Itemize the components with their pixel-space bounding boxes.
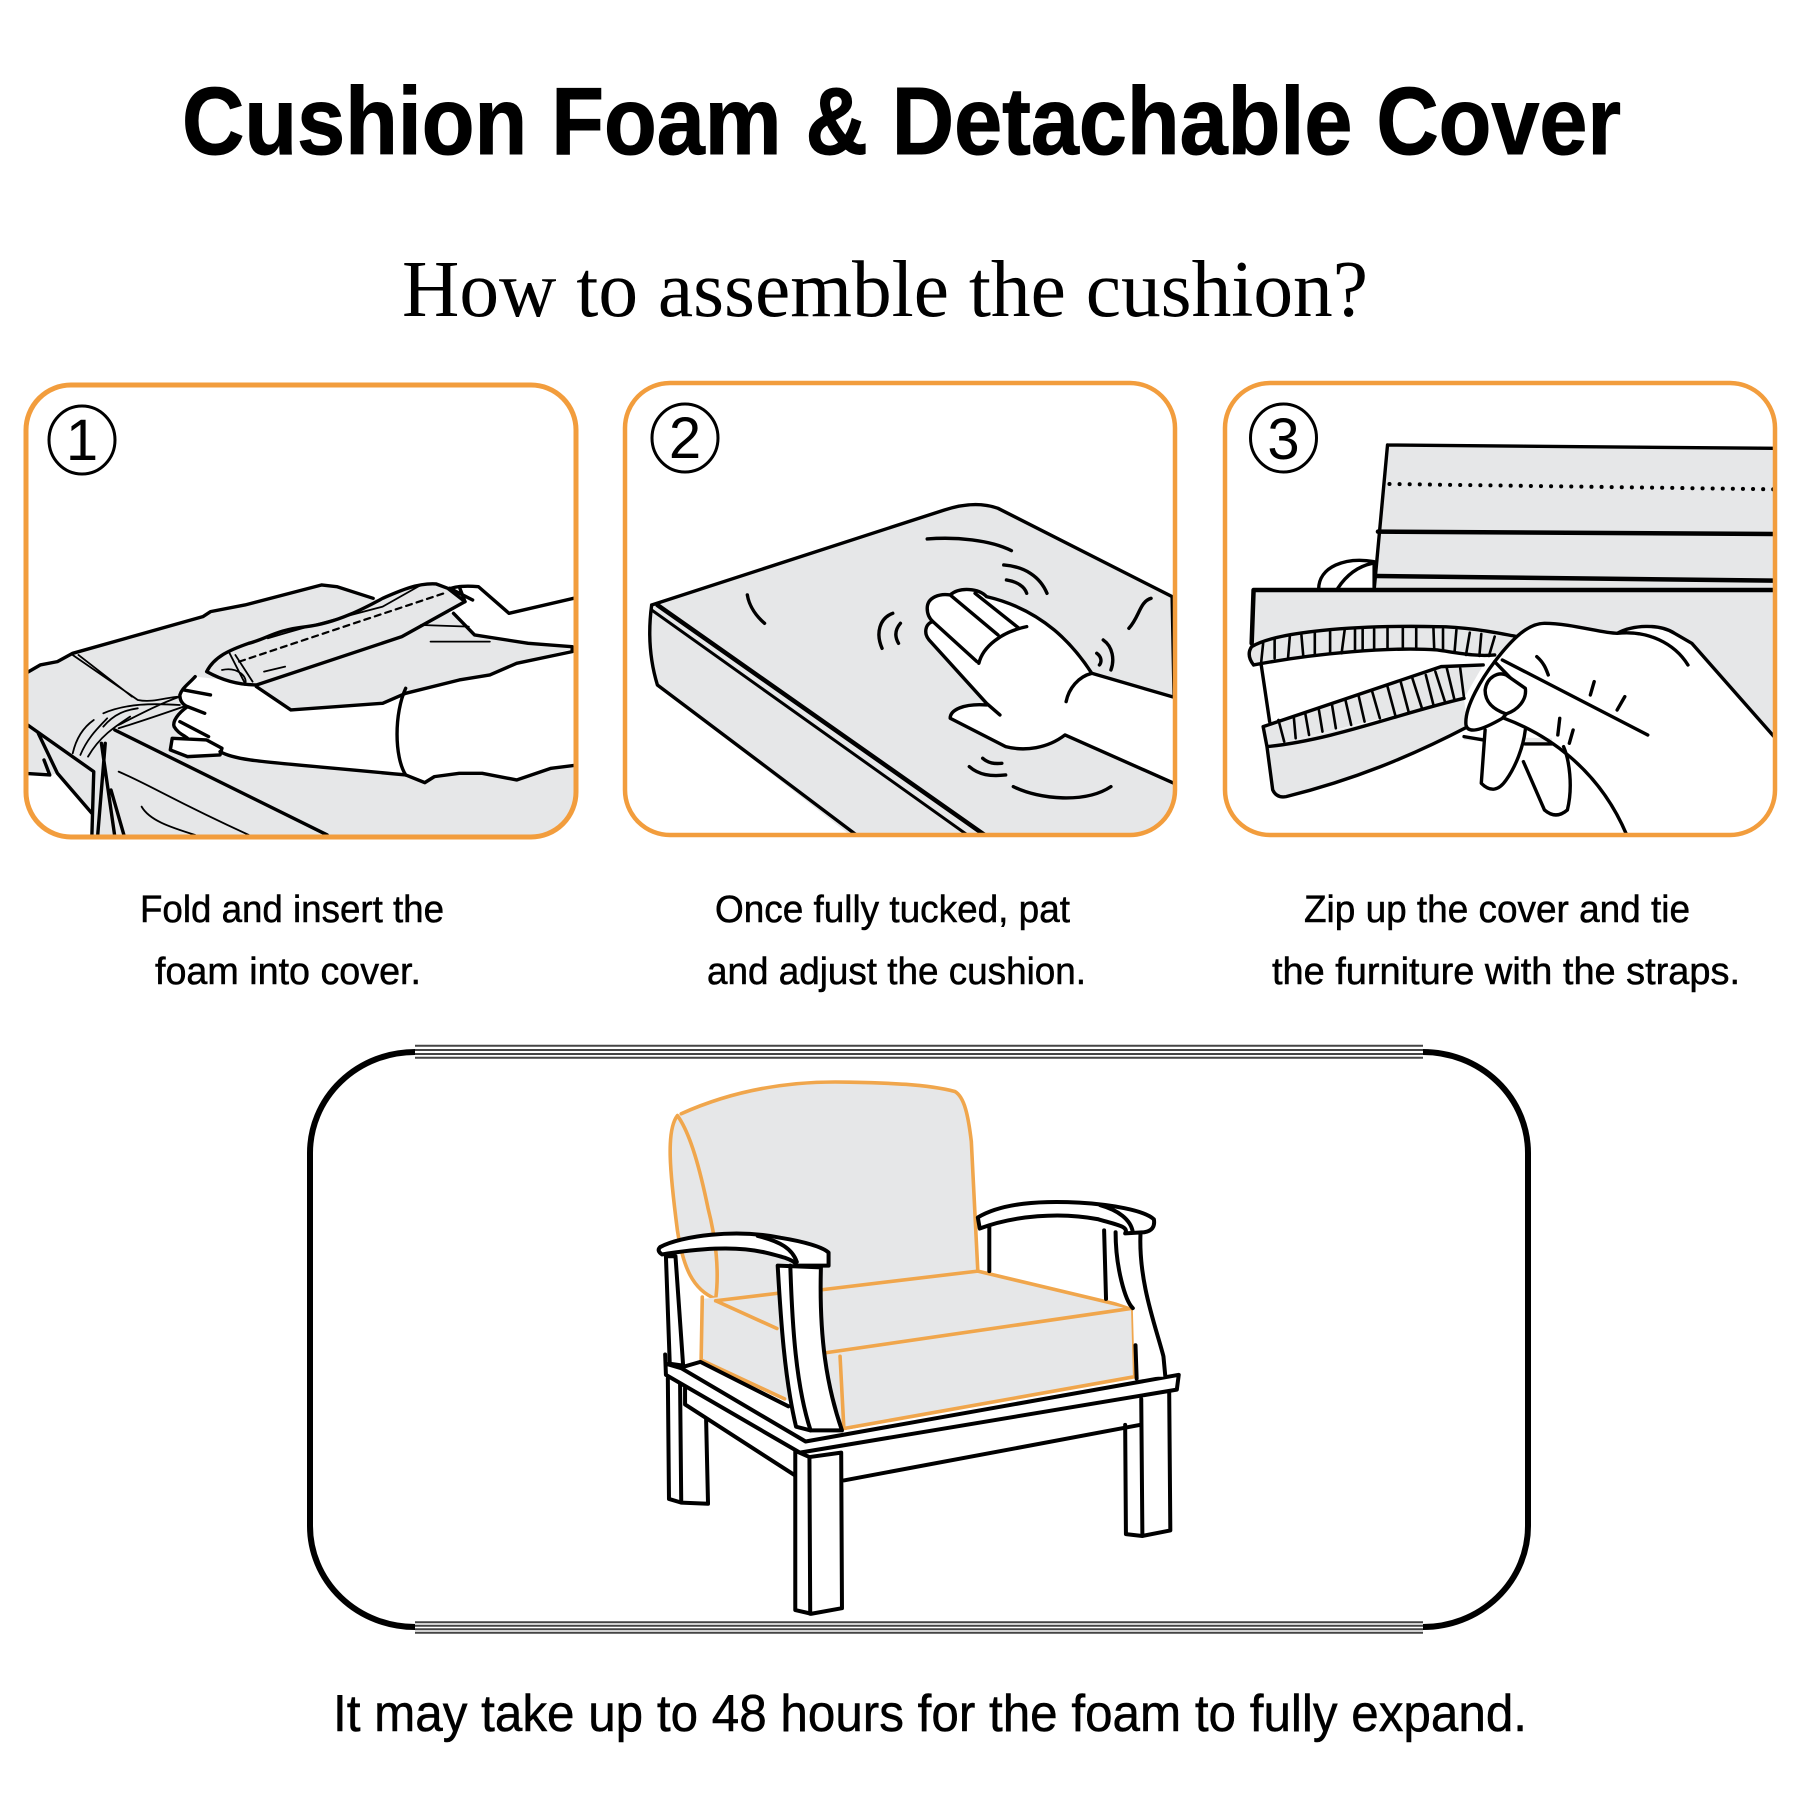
caption 2: and adjust the cushion.	[707, 951, 1086, 993]
caption 2	[707, 889, 1086, 993]
step 3 zipper strips	[1251, 640, 1510, 745]
front leg	[795, 1451, 842, 1614]
step 3 tie loop	[1319, 560, 1374, 589]
step 3 lines	[1374, 445, 1774, 590]
caption 2: Once fully tucked, pat	[715, 889, 1070, 931]
step 3 border	[1225, 383, 1775, 835]
panel: step 1	[23, 385, 578, 840]
step 3 upper cushion	[1374, 445, 1778, 590]
subtitle: How to assemble the cushion?	[402, 246, 1368, 334]
caption 3: the furniture with the straps.	[1272, 951, 1740, 993]
step 1 fabric fill	[23, 585, 578, 837]
caption 1: Fold and insert the	[140, 889, 444, 931]
badge 2	[652, 404, 718, 472]
illustration: chair with cushions	[659, 1082, 1179, 1614]
step 3 middle cover	[1250, 590, 1778, 743]
step 3 hand	[1516, 625, 1688, 644]
step 1 border	[26, 385, 576, 837]
step 1 right hand	[448, 587, 578, 646]
caption 3: Zip up the cover and tie	[1304, 889, 1690, 931]
step 2 hand	[926, 589, 1178, 784]
step 2 outlines	[650, 505, 1174, 835]
step 2 cushion fill	[650, 505, 1178, 840]
badge 3: 3	[1267, 407, 1300, 472]
rails	[685, 1388, 1140, 1480]
step 1 white background at lower left	[88, 822, 90, 834]
right arm posts	[1104, 1230, 1165, 1377]
step 3 strip behind fingers	[1464, 737, 1552, 742]
caption 1: foam into cover.	[155, 951, 421, 993]
panel: step 3	[1225, 383, 1778, 840]
right armrest	[978, 1202, 1154, 1233]
step 1 outlines	[23, 585, 373, 675]
seat cushion	[701, 1271, 1135, 1429]
footer note: It may take up to 48 hours for the foam to fully expand.	[333, 1685, 1527, 1743]
panel: step 2	[625, 383, 1178, 840]
right leg	[1125, 1390, 1170, 1536]
badge 2: 2	[669, 406, 701, 471]
left arm posts	[666, 1256, 683, 1366]
left armrest	[659, 1234, 829, 1266]
badge 3	[1250, 404, 1316, 472]
step 3 lower flap	[1267, 700, 1468, 797]
title: Cushion Foam & Detachable Cover	[182, 68, 1621, 175]
step 2 border	[625, 383, 1175, 835]
chair frame panel	[310, 1046, 1528, 1633]
caption 3	[1272, 889, 1740, 993]
step 1 left arm	[170, 647, 578, 783]
back left leg	[668, 1379, 708, 1504]
seat frame	[665, 1362, 1179, 1453]
caption 1	[140, 889, 444, 993]
back cushion	[670, 1082, 978, 1301]
badge 1: 1	[66, 408, 98, 473]
badge 1	[49, 406, 115, 474]
